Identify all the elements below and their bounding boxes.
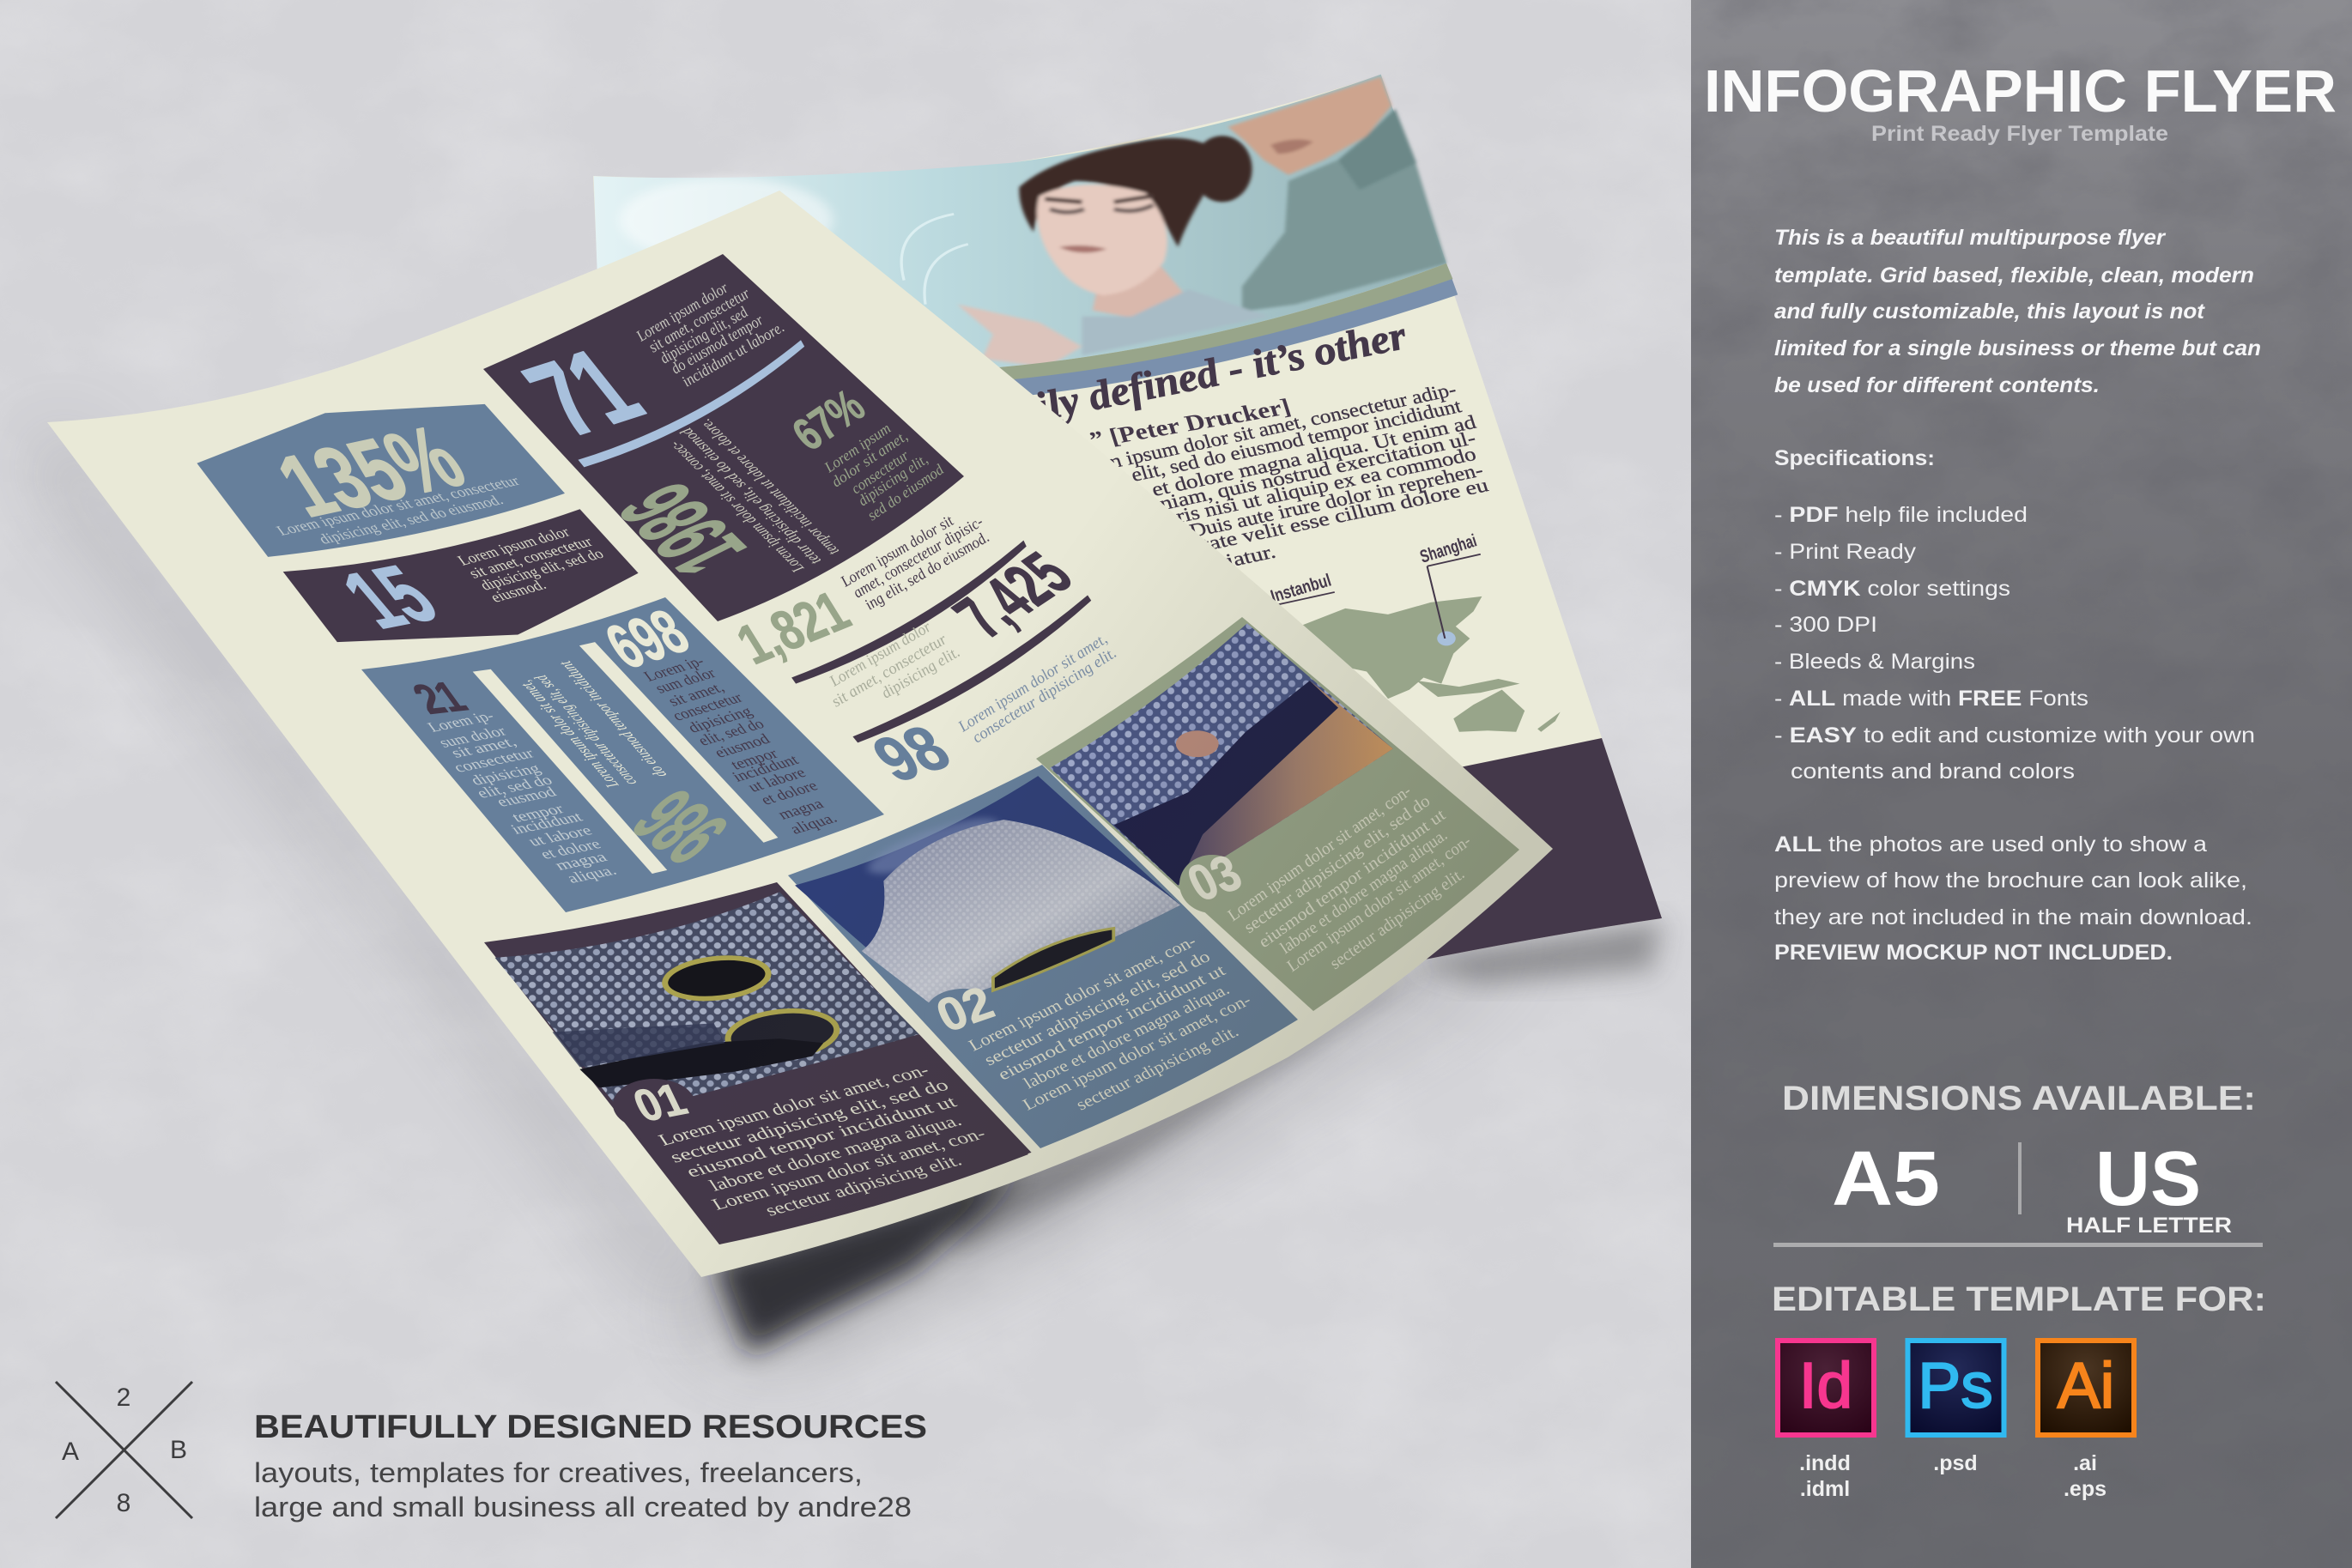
number: 03: 03 [1179, 844, 1251, 912]
stat: 71: 71 [502, 327, 664, 457]
footer tagline: large and small business all created by andre28 [254, 1492, 912, 1523]
text: 03: labore et dolore magna aliqua. [1277, 826, 1451, 958]
text: 02: sectetur adipisicing elit. [1073, 1022, 1242, 1114]
panel: 01 [484, 882, 1032, 1244]
curved blue divider [578, 340, 804, 467]
footer logo: A28B cross: 2 [117, 1383, 130, 1412]
column text: 698: ut labore [744, 765, 809, 796]
number: 02: 02 [929, 977, 1002, 1042]
text: 02 [966, 932, 1255, 1114]
dark rule lines [791, 541, 1091, 742]
intro paragraph: and fully customizable, this layout is not [1774, 300, 2206, 324]
block: 7,425 [826, 541, 1088, 711]
stat: 135%: 135% [259, 408, 482, 536]
column text: 21: Lorem ip- [424, 708, 498, 736]
specifications heading: Specifications: [1774, 446, 1935, 470]
subtitle: Print Ready Flyer Template [1871, 122, 2168, 146]
caption: 1986 rotated: Lorem ipsum dolor sit amet, consec- [665, 438, 809, 576]
photos disclaimer [1774, 832, 2252, 965]
photos disclaimer: ALL the photos are used only to show a [1774, 832, 2207, 857]
stat: 698: 698 [592, 596, 702, 682]
specifications list: - Print Ready [1774, 540, 1917, 564]
back sheet photo: couple [594, 75, 1446, 367]
caption: 71: do eiusmod tempor [667, 312, 767, 378]
file types: psd: .psd [1933, 1451, 1978, 1475]
footer logo: A28B cross: A [62, 1438, 79, 1466]
footer logo: A28B cross: 8 [117, 1489, 130, 1517]
text: 01: Lorem ipsum dolor sit amet, con- [655, 1060, 933, 1149]
column text: 21 [424, 708, 621, 887]
text: 03: sectetur adipisicing elit. [1327, 864, 1468, 973]
back sheet body text: riatur. [1215, 541, 1278, 573]
text: 02: labore et dolore magna aliqua. [1021, 980, 1234, 1093]
caption: 1986 rotated: tempor incididunt ut labore et dolore. [696, 416, 843, 558]
file types: indd: .idml [1800, 1477, 1850, 1501]
photos disclaimer: preview of how the brochure can look alike, [1774, 869, 2247, 893]
cream column dividers [473, 642, 778, 874]
caption: 67%: dolor sit amet, [827, 427, 911, 490]
caption: 1,821: ing elit, sed do eiusmod. [861, 529, 993, 614]
size divider [2018, 1142, 2022, 1214]
caption: 15: eiusmod. [487, 577, 550, 606]
column text: 21: et dolore [536, 837, 604, 863]
specifications list [1774, 503, 2255, 784]
caption: 1986 rotated: tetur dipisicing elit, sed do eiusmod [677, 425, 825, 567]
back sheet world map [1274, 554, 1561, 732]
panel: 15 [283, 509, 639, 645]
caption: 1,821: Lorem ipsum dolor sit [837, 512, 958, 590]
photo: silver building [795, 776, 1180, 1006]
caption: 67%: sed do eiusmod [864, 461, 948, 524]
specifications list: - 300 DPI [1774, 613, 1877, 637]
caption: 7,425: Lorem ipsum dolor [826, 618, 936, 690]
back sheet dark footer [1288, 738, 1662, 961]
icon: Photoshop: Ps [1918, 1349, 1993, 1421]
icon: Photoshop [1907, 1341, 2003, 1435]
number tab: 03 [1179, 855, 1245, 913]
photos disclaimer: they are not included in the main download. [1774, 905, 2252, 929]
footer heading: BEAUTIFULLY DESIGNED RESOURCES [254, 1409, 927, 1445]
text: 03: Lorem ipsum dolor sit amet, con- [1284, 832, 1475, 976]
number tab: 02 [924, 989, 1002, 1040]
text: 03 [1225, 781, 1475, 976]
rotated text: middle column: consectetur dipisicing elit, sed [531, 673, 641, 787]
panel: 135% [197, 404, 565, 557]
stat: 7,425: 7,425 [938, 541, 1088, 651]
file types: ai: .eps [2064, 1477, 2106, 1501]
caption: 7,425: sit amet, consectetur [827, 631, 951, 711]
panel: right sidebar [1691, 0, 2352, 1568]
text: 02: Lorem ipsum dolor sit amet, con- [966, 932, 1200, 1055]
column text: 698: sit amet, [664, 680, 728, 710]
column text: 698: aliqua. [786, 810, 841, 838]
specifications list: - ALL made with FREE Fonts [1774, 687, 2088, 711]
caption: 135%: dipisicing elit, sed do eiusmod. [315, 493, 507, 548]
intro paragraph [1774, 226, 2261, 397]
file types: indd: .indd [1799, 1451, 1851, 1475]
intro paragraph: be used for different contents. [1774, 373, 2100, 397]
icon: Illustrator: Ai [2058, 1349, 2114, 1421]
caption: 67% [821, 420, 948, 524]
column text: 698 [640, 653, 841, 838]
caption: 135%: Lorem ipsum dolor sit amet, consectetur [273, 473, 524, 539]
front sheet paper [47, 191, 1553, 1277]
back sheet body text: re et dolore magna aliqua. Ut enim ad [1125, 411, 1479, 506]
caption: 1,821: amet, consectetur dipisic- [849, 513, 987, 602]
text: 01: Lorem ipsum dolor sit amet, con- [708, 1123, 990, 1214]
back sheet body text: . Duis aute irure dolor in reprehen- [1176, 459, 1486, 544]
column text: 698: Lorem ip- [640, 653, 708, 685]
back flyer sheet [593, 75, 1662, 961]
front flyer sheet [47, 191, 1553, 1277]
back sheet body text: ptate velit esse cillum dolore eu [1188, 474, 1491, 558]
icon: Illustrator [2038, 1341, 2134, 1435]
column text: 21: elit, sed do [473, 772, 556, 802]
rule [1773, 1243, 2263, 1247]
caption: 71: dipisicing elit, sed [656, 304, 752, 367]
back sheet curved colour bands [997, 263, 1458, 396]
column text: 698: sum dolor [652, 665, 719, 697]
column text: 21: eiusmod [493, 784, 561, 810]
stat: 21: 21 [403, 674, 476, 723]
column text: 698: consectetur [669, 690, 747, 724]
stat: 67%: 67% [783, 380, 875, 461]
size: A5: A5 [1832, 1136, 1940, 1222]
caption: 71 [633, 279, 788, 390]
stat: 1,821: 1,821 [726, 580, 861, 676]
caption: 15: Lorem ipsum dolor [454, 524, 574, 569]
column text: 21: ut labore [524, 823, 596, 850]
stat: 15: 15 [322, 549, 457, 645]
specifications list: contents and brand colors [1791, 760, 2075, 784]
caption: 71: sit amet, consectetur [645, 285, 755, 356]
caption: 1986 rotated [665, 416, 843, 576]
stat: 1986 rotated: 1986 [597, 470, 767, 589]
panel: 02 [788, 765, 1298, 1148]
panel: 03 [1036, 617, 1519, 1011]
icon: InDesign [1778, 1341, 1874, 1435]
column text: 698: tempor [727, 746, 782, 773]
text: 01: sectetur adipisicing elit. [761, 1151, 966, 1220]
column text: 21: tempor [508, 801, 568, 826]
footer tagline [254, 1457, 912, 1523]
text: 03: Lorem ipsum dolor sit amet, con- [1225, 781, 1415, 925]
sheet shading near the curled corner [47, 191, 1553, 1277]
photos disclaimer: PREVIEW MOCKUP NOT INCLUDED. [1774, 941, 2173, 965]
footer tagline: layouts, templates for creatives, freelancers, [254, 1457, 863, 1488]
intro paragraph: template. Grid based, flexible, clean, modern [1774, 263, 2254, 288]
text: 01: labore et dolore magna aliqua. [706, 1111, 966, 1195]
back sheet paper [593, 75, 1662, 961]
block: 98 [859, 631, 1120, 795]
column text: 698: et dolore [757, 778, 821, 808]
number tab: 01 [613, 1079, 695, 1130]
rotated text: middle column: Lorem ipsum dolor sit amet, [515, 678, 623, 790]
caption: 15 [454, 524, 608, 606]
caption: 71: incididunt ut labore. [678, 319, 788, 390]
caption: 98: Lorem ipsum dolor sit amet, [955, 631, 1111, 736]
panel: 21 / 698 / 986 [361, 596, 884, 912]
back sheet body text [1101, 378, 1491, 573]
map label: Shanghai: Shanghai [1418, 530, 1479, 567]
specifications list: - CMYK color settings [1774, 577, 2010, 601]
column text: 21: sum dolor [435, 723, 511, 751]
back sheet body text: oris nisi ut aliquip ex ea commodo [1162, 443, 1478, 530]
stat: 98: 98 [859, 712, 964, 795]
column text: 21: dipisicing [467, 760, 545, 789]
caption: 67%: consectetur [847, 446, 912, 497]
column text: 21: incididunt [507, 809, 587, 838]
back sheet body text: g elit, sed do eiusmod tempor incididunt [1112, 395, 1464, 489]
back sheet body text: m ipsum dolor sit amet, consectetur adip- [1101, 378, 1458, 474]
text: 02: eiusmod tempor incididunt ut [995, 961, 1229, 1084]
text: 01 [655, 1060, 990, 1220]
file types: ai: .ai [2073, 1451, 2097, 1475]
drop shadows under sheets [34, 429, 1662, 1365]
column text: 21: magna [551, 849, 611, 874]
caption: 15: dipisicing elit, sed do [476, 546, 608, 594]
caption: 15: sit amet, consectetur [465, 534, 597, 582]
caption: 98: consectetur dipisicing elit. [968, 645, 1120, 747]
block: 1,821 [726, 512, 993, 676]
stat: 986 rotated: 986 [613, 775, 746, 880]
text: 01: sectetur adipisicing elit, sed do [666, 1075, 952, 1166]
back sheet heading: ily defined - it’s other [1029, 313, 1412, 429]
size note: half letter: HALF LETTER [2066, 1214, 2232, 1238]
footer logo: A28B cross: B [170, 1436, 187, 1464]
title: INFOGRAPHIC FLYER [1704, 58, 2337, 124]
column text: 698: eiusmod [711, 731, 774, 761]
text: 02: Lorem ipsum dolor sit amet, con- [1020, 991, 1255, 1114]
column text: 698: magna [774, 796, 827, 823]
text: 01: eiusmod tempor incididunt ut [682, 1092, 961, 1181]
caption: 67%: dipisicing elit, [854, 451, 931, 509]
footer logo: A28B cross [56, 1382, 192, 1518]
intro paragraph: This is a beautiful multipurpose flyer [1774, 226, 2166, 250]
rotated text: middle column [515, 658, 671, 790]
intro paragraph: limited for a single business or theme but can [1774, 336, 2261, 360]
specifications list: - PDF help file included [1774, 503, 2028, 527]
caption: 71: Lorem ipsum dolor [633, 279, 732, 345]
column text: 21: sit amet, [447, 734, 520, 761]
specifications list: - Bleeds & Margins [1774, 650, 1975, 674]
number: 01: 01 [626, 1075, 694, 1131]
background: paper surface [0, 0, 1691, 1568]
editable heading: EDITABLE TEMPLATE FOR: [1772, 1280, 2266, 1318]
panel text area fill [615, 1034, 1032, 1244]
panel: 71 / 67% / 1986 [483, 254, 964, 621]
specifications list: - EASY to edit and customize with your own [1774, 723, 2255, 748]
dimensions heading: DIMENSIONS AVAILABLE: [1782, 1080, 2256, 1117]
column text: 21: consectetur [450, 746, 538, 776]
photo: honeycomb facade [495, 892, 919, 1105]
back sheet body text: eniam, quis nostrud exercitation ul- [1147, 427, 1478, 517]
column text: 698: incididunt [729, 752, 803, 785]
caption: 7,425: dipisicing elit. [877, 644, 964, 702]
column text: 698: dipisicing [684, 704, 756, 736]
text: 03: eiusmod tempor incididunt ut [1256, 805, 1449, 952]
caption: 67%: Lorem ipsum [821, 420, 894, 476]
map label: Instanbul: Instanbul [1269, 571, 1334, 607]
icon: InDesign: Id [1799, 1349, 1852, 1421]
text: 02: sectetur adipisicing elit, sed do [981, 947, 1214, 1069]
rotated text: middle column: do eiusmod tempor incididunt [555, 658, 671, 779]
text: 03: sectetur adipisicing elit, sed do [1241, 791, 1434, 937]
size: US: US [2095, 1136, 2201, 1222]
column text: 21: aliqua. [563, 863, 621, 887]
photo: facade at sunset [1050, 623, 1393, 886]
back sheet quote attribution: .” [Peter Drucker] [1080, 394, 1294, 454]
column text: 698: elit, sed do [694, 716, 768, 749]
